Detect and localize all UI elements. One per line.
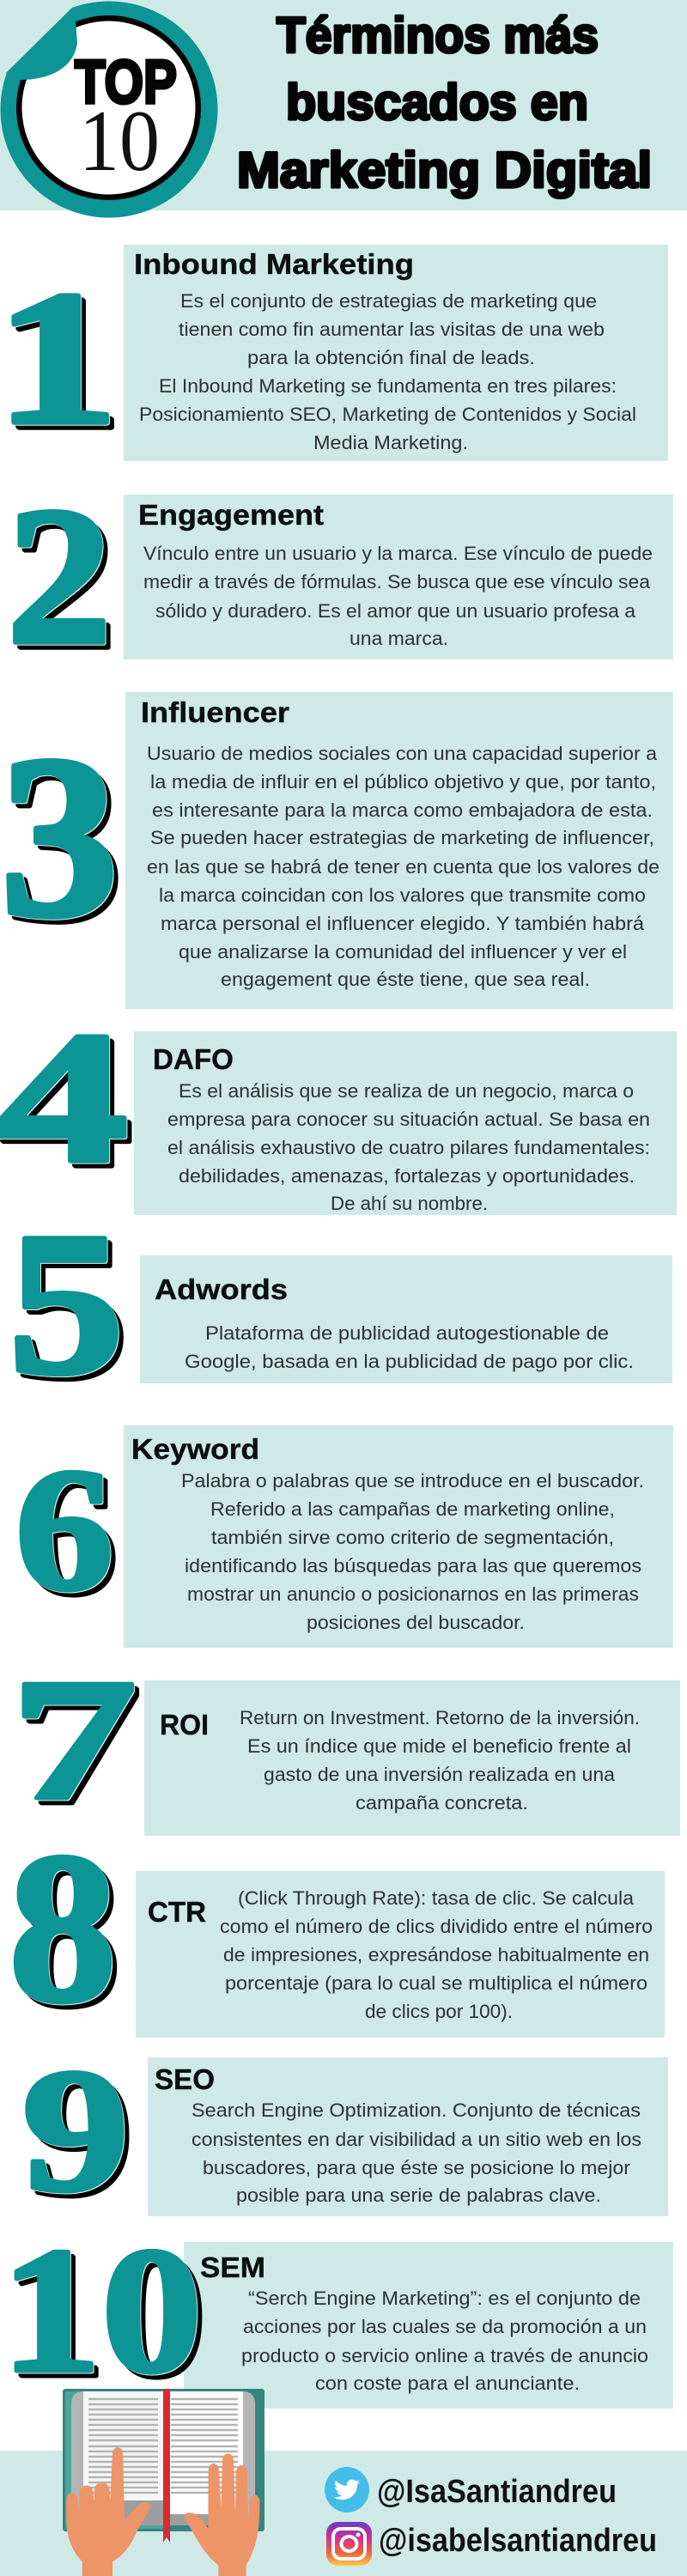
panel: Engagement: Vínculo entre un usuario y la marca. Ese vínculo de puede xyxy=(143,543,653,564)
panel: SEO: buscadores, para que éste se posicione lo mejor xyxy=(203,2157,630,2178)
panel: Engagement: medir a través de fórmulas. Se busca que ese vínculo sea xyxy=(143,571,651,592)
panel: Keyword: Palabra o palabras que se introduce en el buscador. xyxy=(181,1470,644,1492)
number 8: 8 xyxy=(9,1809,117,2047)
panel: Keyword: posiciones del buscador. xyxy=(307,1612,525,1633)
panel: Influencer: marca personal el influencer elegido. Y también habrá xyxy=(161,913,645,934)
panel: Influencer: engagement que éste tiene, que sea real. xyxy=(221,969,590,990)
panel: CTR: como el número de clics dividido entre el número xyxy=(220,1916,653,1937)
panel: Engagement: Engagement xyxy=(138,499,324,531)
panel: Inbound Marketing: El Inbound Marketing se fundamenta en tres pilares: xyxy=(159,375,617,397)
panel: ROI: gasto de una inversión realizada en una xyxy=(264,1764,616,1785)
panel: DAFO: empresa para conocer su situación actual. Se basa en xyxy=(167,1109,650,1130)
panel: Engagement: una marca. xyxy=(350,628,448,649)
panel: Inbound Marketing: Posicionamiento SEO, Marketing de Contenidos y Social xyxy=(139,404,636,425)
panel: Engagement xyxy=(124,495,673,659)
badge: top 10 sticker: TOP xyxy=(75,49,177,117)
number 3: 3 xyxy=(0,708,119,964)
panel: CTR xyxy=(136,1871,665,2038)
panel: Adwords: Google, basada en la publicidad de pago por clic. xyxy=(185,1351,634,1372)
title: Marketing Digital xyxy=(237,143,652,198)
panel: Influencer: es interesante para la marca como embajadora de esta. xyxy=(152,799,653,821)
number 2: 2 xyxy=(7,467,112,685)
panel: Influencer: Usuario de medios sociales con una capacidad superior a xyxy=(147,743,658,764)
title: buscados en xyxy=(286,75,588,131)
panel: SEM: SEM xyxy=(200,2251,265,2283)
panel: SEM: “Serch Engine Marketing”: es el conjunto de xyxy=(248,2287,641,2309)
number 5: 5 xyxy=(9,1191,124,1417)
panel: DAFO: debilidades, amenazas, fortalezas y oportunidades. xyxy=(179,1165,635,1187)
panel: Influencer: Se pueden hacer estrategias de marketing de influencer, xyxy=(150,827,654,848)
panel: SEO xyxy=(148,2057,668,2216)
panel: SEM: acciones por las cuales se da promoción a un xyxy=(243,2316,647,2337)
panel: CTR: (Click Through Rate): tasa de clic. Se calcula xyxy=(238,1887,635,1909)
panel: Inbound Marketing: tienen como fin aumentar las visitas de una web xyxy=(179,319,605,340)
panel: CTR: CTR xyxy=(148,1896,206,1928)
title: Términos más xyxy=(277,8,599,64)
number 7: 7 xyxy=(10,1643,137,1836)
panel: Inbound Marketing: para la obtención final de leads. xyxy=(247,347,535,368)
icon: twitter xyxy=(325,2467,369,2512)
panel: SEO: Search Engine Optimization. Conjunto de técnicas xyxy=(192,2099,641,2121)
panel: CTR: de impresiones, expresándose habitualmente en xyxy=(223,1944,649,1965)
panel: SEM: con coste para el anunciante. xyxy=(315,2372,580,2394)
panel: ROI: Return on Investment. Retorno de la inversión. xyxy=(240,1707,640,1728)
panel: Keyword xyxy=(124,1425,673,1648)
panel: Adwords xyxy=(140,1255,672,1383)
instagram handle: @isabelsantiandreu xyxy=(379,2523,657,2559)
header band xyxy=(0,0,687,210)
panel: SEO: SEO xyxy=(155,2063,215,2095)
panel: Influencer: que analizarse la comunidad del influencer y ver el xyxy=(179,941,627,963)
panel: ROI xyxy=(144,1680,680,1836)
panel: Influencer: Influencer xyxy=(141,696,289,728)
panel: CTR: de clics por 100). xyxy=(365,2001,513,2022)
panel: Engagement: sólido y duradero. Es el amor que un usuario profesa a xyxy=(155,600,636,622)
panel: DAFO: De ahí su nombre. xyxy=(331,1193,488,1214)
panel: DAFO: el análisis exhaustivo de cuatro pilares fundamentales: xyxy=(167,1137,650,1158)
panel: Influencer: la media de influir en el público objetivo y que, por tanto, xyxy=(150,771,656,793)
panel: SEO: posible para una serie de palabras clave. xyxy=(236,2184,601,2206)
panel: Inbound Marketing xyxy=(124,245,668,461)
number 9: 9 xyxy=(21,2032,130,2228)
panel: CTR: porcentaje (para lo cual se multiplica el número xyxy=(225,1972,647,1994)
panel: Inbound Marketing: Es el conjunto de estrategias de marketing que xyxy=(180,290,597,312)
panel: ROI: ROI xyxy=(160,1709,209,1741)
panel: SEO: consistentes en dar visibilidad a un sitio web en los xyxy=(192,2129,641,2150)
panel: DAFO: Es el análisis que se realiza de un negocio, marca o xyxy=(179,1080,634,1102)
panel: Influencer: en las que se habrá de tener en cuenta que los valores de xyxy=(147,856,660,878)
number 6: 6 xyxy=(15,1432,113,1627)
panel: DAFO xyxy=(134,1031,677,1215)
badge: top 10 sticker: 10 xyxy=(79,93,160,190)
panel: Keyword: Keyword xyxy=(131,1433,259,1465)
panel: SEM xyxy=(184,2242,673,2409)
icon: open book with hands xyxy=(63,2389,264,2576)
number 10: 10 xyxy=(1,2210,202,2410)
badge: top 10 sticker xyxy=(0,0,218,218)
panel: Keyword: mostrar un anuncio o posicionarnos en las primeras xyxy=(187,1583,639,1605)
panel: Inbound Marketing: Inbound Marketing xyxy=(134,248,414,280)
panel: Inbound Marketing: Media Marketing. xyxy=(313,432,468,453)
panel: Keyword: también sirve como criterio de segmentación, xyxy=(211,1527,614,1548)
panel: DAFO: DAFO xyxy=(153,1043,234,1075)
panel: SEM: producto o servicio online a través de anuncio xyxy=(241,2345,648,2366)
panel: Keyword: identificando las búsquedas para las que queremos xyxy=(185,1555,641,1577)
icon: instagram xyxy=(326,2522,372,2566)
panel: Adwords: Plataforma de publicidad autogestionable de xyxy=(205,1322,609,1344)
title xyxy=(237,8,652,198)
footer band xyxy=(0,2451,687,2576)
panel: Adwords: Adwords xyxy=(155,1273,288,1305)
panel: ROI: Es un índice que mide el beneficio frente al xyxy=(247,1735,631,1757)
panel: Keyword: Referido a las campañas de marketing online, xyxy=(210,1498,615,1520)
panel: Influencer xyxy=(125,692,673,1009)
twitter handle: @IsaSantiandreu xyxy=(377,2474,617,2510)
panel: Influencer: la marca coincidan con los valores que transmite como xyxy=(159,884,646,906)
panel: ROI: campaña concreta. xyxy=(356,1792,528,1814)
